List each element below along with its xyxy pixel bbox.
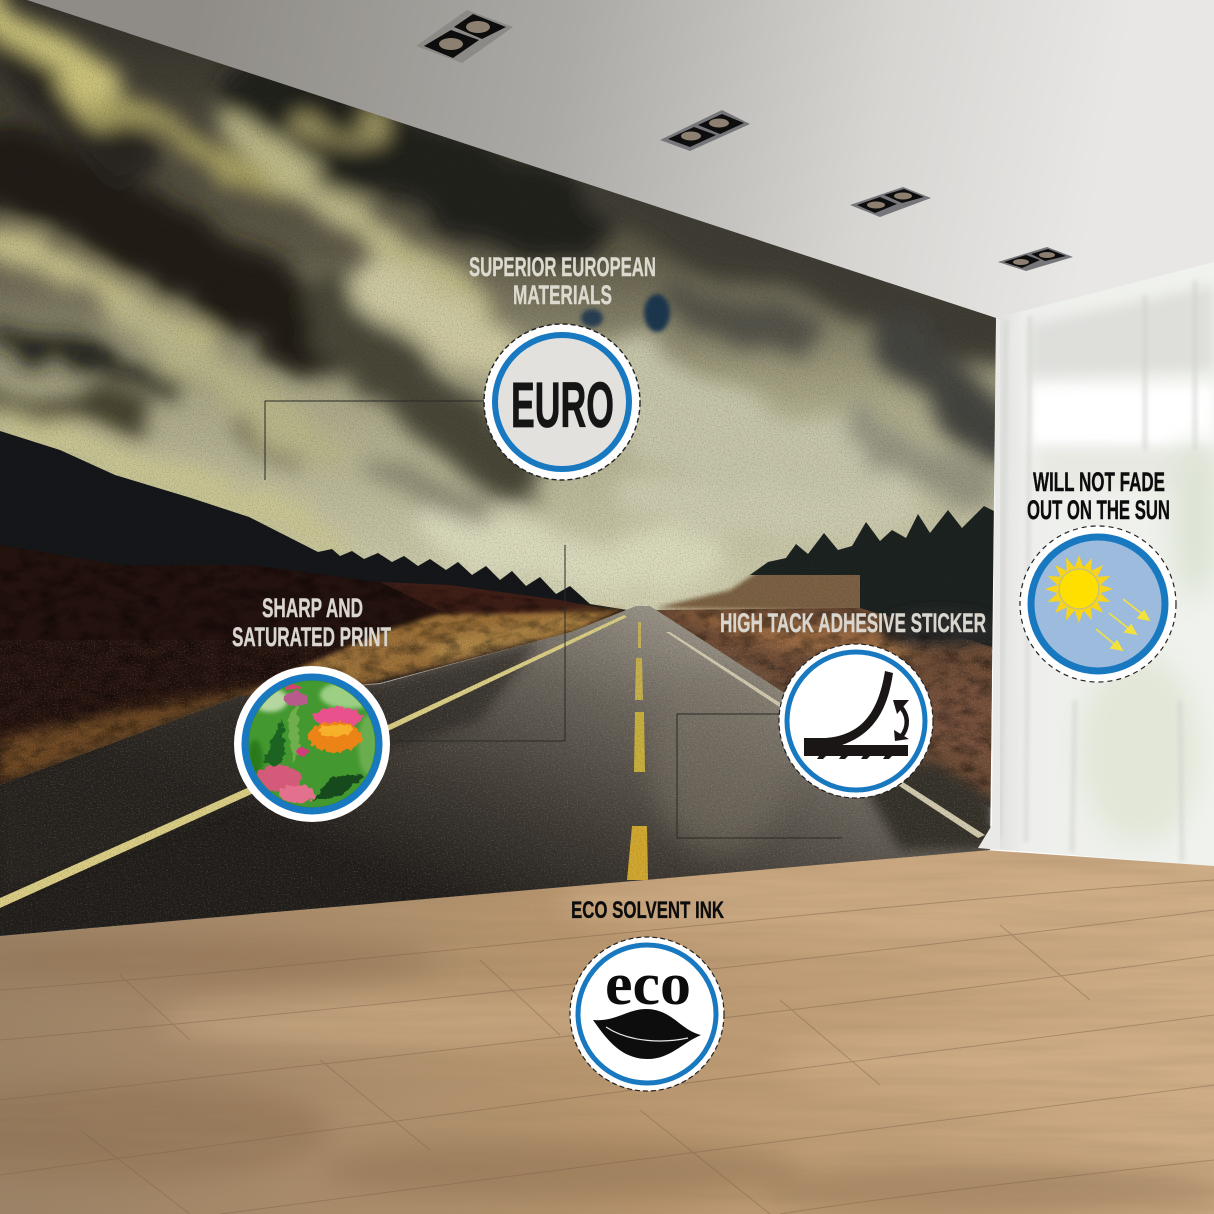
icon: sun (1045, 555, 1113, 623)
badge: sun resistance (1020, 526, 1176, 682)
label: eco solvent ink: ECO SOLVENT INK (571, 897, 724, 924)
right wall and curtain (978, 262, 1214, 866)
label: sharp and saturated print (232, 593, 391, 652)
badge: EURO (484, 324, 640, 480)
label: superior european materials: SUPERIOR EUROPEAN (469, 252, 656, 282)
connector lines (265, 401, 842, 838)
ceiling (0, 0, 1214, 330)
mural road (0, 606, 996, 940)
icon: sun rays arrows (1096, 599, 1149, 650)
wall mural: road landscape (0, 0, 1000, 940)
label: will not fade out on the sun (1027, 467, 1170, 525)
icon: peeling sticker (804, 671, 909, 759)
icon: leaf (593, 1009, 701, 1059)
badge: adhesive sticker (779, 644, 933, 798)
badge: eco (570, 937, 724, 1091)
floor (0, 830, 1214, 1214)
label: superior european materials (469, 252, 656, 310)
recessed ceiling lights (416, 10, 1073, 271)
badge: eco: eco (605, 951, 691, 1017)
mural field texture (0, 562, 992, 790)
badge: EURO: EURO (511, 369, 614, 441)
label: sharp and saturated print: SHARP AND (262, 593, 363, 623)
mural sky clouds (0, 0, 1000, 620)
label: sharp and saturated print: SATURATED PRINT (232, 622, 391, 652)
mural film grain (0, 0, 1000, 940)
label: high tack adhesive sticker: HIGH TACK ADHESIVE STICKER (720, 608, 986, 638)
badge: flower print (234, 666, 390, 822)
mural distant mountains and fields (0, 431, 1000, 810)
curtain hem over wall corner (978, 318, 1000, 850)
label: superior european materials: MATERIALS (513, 280, 612, 310)
